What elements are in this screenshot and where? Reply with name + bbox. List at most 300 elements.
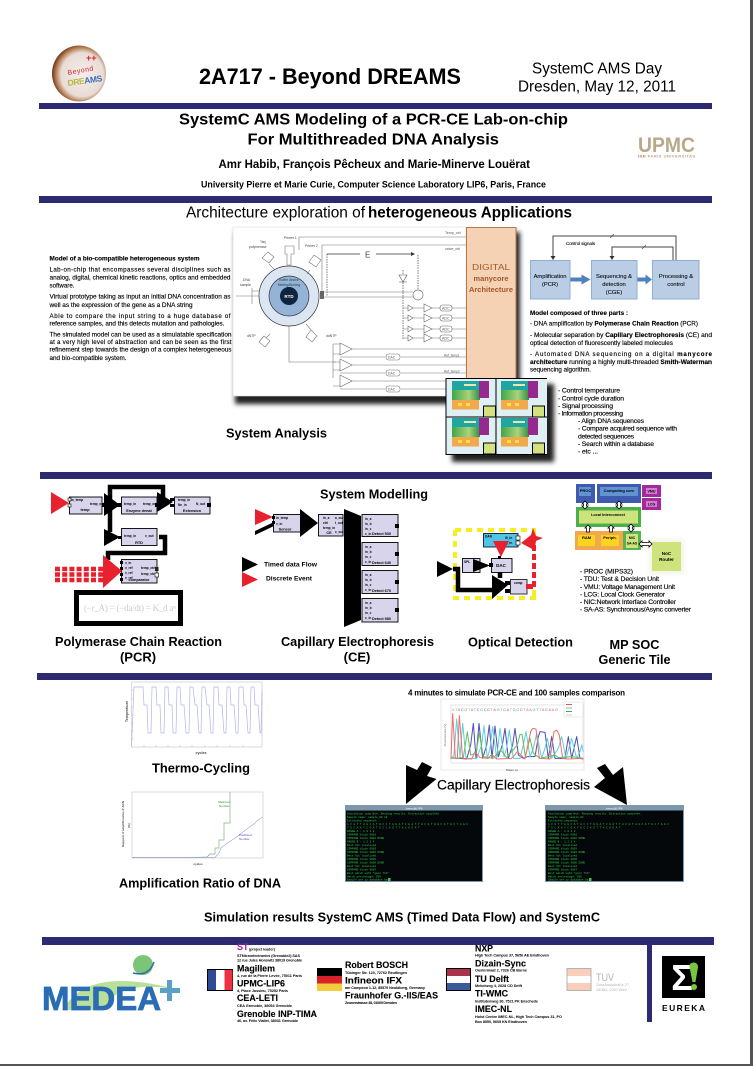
block: detector 580: Detect 580 — [372, 617, 391, 621]
block: enzyme denat: temp_in — [124, 502, 136, 506]
terminal: SystemC AMS run: COMPARE block 0004 DONE — [347, 850, 384, 854]
text block: model composition: - Automated DNA sequencing on a digital manycore — [530, 351, 713, 358]
partners: Netherlands: IMEC-NL — [475, 1004, 512, 1015]
block: detector 530: c_in — [365, 532, 371, 536]
box: amplification — [530, 260, 570, 299]
chart: thermo-cycling — [125, 682, 262, 755]
partners: Netherlands: Oostermaat 2, 7326 CB Borne — [475, 968, 527, 972]
amplifiers and reference lines: Ref_temp2 — [444, 370, 460, 374]
block: temp: in_temp — [71, 498, 83, 502]
block: detector 640: in_b — [365, 550, 372, 554]
caption: capillary electrophoresis result: Capillary Electrophoresis — [437, 778, 590, 792]
chart legend — [564, 702, 583, 717]
chip: circular reactor: Buffer device — [279, 278, 299, 282]
block: temp: temp — [80, 508, 90, 512]
chart: amplification ratio: Malicious — [218, 800, 231, 804]
block: comparator: comparator — [129, 578, 150, 582]
text block: system model description: and bio-compatible system. — [50, 355, 127, 362]
block: RTD — [122, 528, 157, 546]
terminal: SystemC AMS run: Sample name: sample_00 CE — [347, 815, 388, 819]
chart: amplification ratio — [121, 792, 263, 866]
footer divider — [42, 937, 714, 945]
block: comparator — [122, 560, 158, 583]
tile 1 — [452, 381, 496, 417]
chip: circular reactor — [259, 266, 324, 326]
terminal: SystemC AMS run: A C G T T A G C A T G C C T A G A T C G A T T A C G T A G C A T G C T A G C — [347, 823, 468, 826]
block: sensor: in_temp — [276, 516, 288, 520]
partners: Austria: TUV — [596, 972, 615, 984]
block: extension: Extension — [183, 509, 202, 513]
terminal: SystemC run: COMPARE block 0001 — [548, 832, 577, 836]
block: CE: t_out — [335, 521, 344, 525]
footer vertical divider — [647, 945, 652, 1022]
block: sensor: v_in — [276, 522, 282, 526]
block: source: DAN — [485, 534, 493, 538]
block: detector 670 — [362, 570, 399, 594]
block: memory and peripherals: Periph. — [603, 535, 617, 540]
ADC channels: ADC — [442, 306, 450, 310]
block: DAC: DAC — [496, 563, 507, 568]
terminal: SystemC run: Extracted sequence: — [548, 818, 579, 822]
terminal: SystemC AMS run: COMPARE block 0002 DONE — [347, 836, 384, 840]
partners: Germany: Tübinger Str. 123, 72762 Reutlingen — [345, 971, 408, 975]
block: PROC: PROC — [580, 488, 591, 493]
text block: model composition: - Molecular separation by Capillary Electrophoresis (CE) and — [530, 332, 713, 339]
list: tile legend: - VMU: Voltage Management Unit — [580, 584, 675, 591]
block: NoC router — [649, 539, 684, 574]
block: enzyme denat: temp_out — [143, 502, 158, 506]
list: processing tasks: - Control temperature — [558, 388, 620, 394]
terminal: SystemC run: Simulation complete. Reading results. Extraction complete. — [548, 812, 642, 816]
terminal: SystemC AMS run: COMPARE block 0001 — [347, 832, 376, 836]
partners: Germany: Infineon IFX — [345, 976, 403, 986]
red event bus — [55, 569, 103, 580]
text block: system model description: refinement step towards the design of a complex heterogeneous — [50, 347, 232, 354]
block: detector 670: in_b — [365, 578, 372, 582]
text block: model composition: optical detection of fluorescently labeled molecules — [530, 340, 673, 347]
flag: Netherlands — [446, 968, 470, 990]
box: processing and control — [652, 260, 699, 299]
logo: EUREKA: Σ — [671, 957, 693, 998]
tile 3 — [452, 418, 496, 454]
block: memory and peripherals — [575, 531, 623, 550]
block: detector 530: in_a — [365, 517, 372, 521]
caption: amplification ratio: Amplification Ratio of DNA — [119, 876, 282, 890]
ADC channels — [403, 304, 466, 342]
terminal: SystemC AMS run: Best match with "gene 713" — [347, 871, 389, 875]
terminal: SystemC run — [545, 805, 684, 882]
terminal: SystemC AMS run: COMPARE block 0005 — [347, 857, 376, 861]
block: extension: Ne_in — [178, 503, 187, 507]
affiliation: University Pierre et Marie Curie, Computer Science Laboratory LIP6, Paris, France — [201, 180, 546, 190]
wires and control lines: valve_ctrl — [445, 247, 460, 251]
caption: CE: Capillary Electrophoresis — [281, 634, 434, 649]
section heading: architecture: Architecture exploration of — [186, 204, 366, 222]
partners: France: ST — [237, 942, 249, 952]
caption: CE — [281, 634, 434, 664]
arrows: bus connections — [582, 501, 652, 547]
block: NIC: SA-AS — [627, 542, 638, 546]
terminal: SystemC run: Sample name: sample_02 — [548, 815, 584, 819]
text block: system model description: analog, digital, chemical kinetic reactions, optics and embedded — [50, 274, 231, 281]
event and date: SystemC AMS Day — [532, 60, 662, 78]
box: amplification: Amplification — [534, 274, 566, 280]
partners: Germany — [345, 960, 438, 1005]
partners: Netherlands: High Tech Campus 37, 5656 AE Eindhoven — [475, 954, 550, 958]
terminal: SystemC run: COMPARE block 0004 DONE — [548, 850, 585, 854]
partners: France: 12 rue Jules Horowitz 38019 Grenoble — [237, 958, 302, 962]
flag: France — [208, 970, 232, 990]
title: 2A717 - Beyond DREAMS — [199, 64, 461, 89]
text block: system model description: software. — [50, 283, 75, 290]
partners: Austria: 28/384, 1040 Wien — [596, 988, 627, 992]
terminal: SystemC run: A C G T T A G C A T G C C T A G A T C G A T T A C G T A G C A T G C T A G C — [548, 823, 669, 826]
block: detector 640: c_in — [365, 560, 371, 564]
block: CE: CE — [326, 531, 332, 535]
text block: system model description: Model of a bio-compatible heterogeneous system — [50, 256, 200, 262]
text block: system model description: The simulated model can be used as a simulatable specification — [50, 332, 232, 339]
list: processing tasks: - etc ... — [578, 448, 598, 456]
arrow: right result — [594, 764, 627, 805]
chart: amplification ratio: (%) — [127, 823, 131, 828]
caption: optical detection: Optical Detection — [468, 634, 573, 650]
ADC channels: ADC — [442, 316, 450, 320]
partners: Netherlands: Institutenweg 30, 7521 PK Enschede — [475, 1000, 538, 1004]
partners: France: Magillem — [237, 964, 275, 974]
block: extension: N_out — [196, 502, 206, 506]
partners: France: STMicroelectronics (Grenoble2) SAS — [237, 954, 300, 958]
syringes and reagent labels: dNTP — [247, 334, 256, 338]
block: NIC: NIC — [629, 536, 636, 540]
logo: UPMC: UPMC — [638, 134, 695, 157]
terminal: SystemC run: xterm@LIP6 — [606, 806, 623, 810]
partners: Netherlands: TI-WMC — [475, 988, 508, 1000]
logo: UPMC: IIIII PARIS UNIVERSITAS — [638, 154, 695, 158]
text block: system model description: reference samples, and this detects mutation and pathologies. — [50, 321, 225, 328]
terminal: SystemC AMS run: Simulation complete. Reading results. Extraction complete. — [347, 812, 441, 816]
terminal: SystemC run: COMPARE block 0007 — [548, 868, 577, 872]
list: processing tasks: - Control cycle duration — [558, 396, 624, 402]
list: processing tasks: - Align DNA sequences — [578, 418, 645, 425]
partners: Austria — [596, 972, 630, 992]
block: computing core: Computing core — [604, 488, 635, 493]
caption: system analysis: System Analysis — [226, 426, 327, 440]
terminal: SystemC AMS run: T G C A A T C G A T G C C A G T T A C G G A T — [347, 826, 420, 830]
block: comparator: temp_ctrl — [141, 572, 155, 576]
divider — [39, 196, 712, 203]
wires and control lines — [289, 231, 466, 362]
caption: MP SOC: Generic Tile — [598, 652, 670, 667]
section heading: architecture — [186, 204, 572, 222]
block: source: i1_in — [505, 541, 512, 545]
amplifiers and reference lines — [333, 343, 466, 392]
block: CE: ctrl — [323, 521, 328, 525]
divider — [37, 673, 712, 680]
block: detector 530: Detect 530 — [372, 532, 391, 536]
caption: MP SOC — [598, 637, 670, 667]
poster heading — [179, 112, 568, 148]
partners: France: UPMC-LIP6 — [237, 978, 285, 990]
terminal: SystemC AMS run: RANGE A : 1 0 1 2 — [347, 830, 375, 833]
box: sequencing and detection: Sequencing & — [596, 274, 632, 280]
panel: digital manycore architecture: DIGITAL — [472, 262, 510, 272]
text block: model composition: sequencing algorithm. — [530, 366, 591, 374]
block: temp: temp_out — [90, 502, 105, 506]
chart: electropherogram — [441, 699, 584, 772]
partners: France: Grenoble INP-TIMA — [237, 1009, 317, 1020]
chart: electropherogram: Steps sc — [506, 768, 518, 772]
syringes and reagent labels: Primer 2 — [305, 244, 318, 248]
list: processing tasks: - Search within a database — [578, 441, 654, 448]
panel: digital manycore architecture: Architecture — [469, 285, 513, 294]
diagram: MP SOC tile — [575, 484, 684, 574]
block: enzyme denat — [122, 497, 158, 514]
flow diagram: three stages — [530, 234, 699, 299]
section heading: architecture: heterogeneous Applications — [368, 204, 572, 222]
partners: Netherlands — [475, 944, 562, 1024]
partners: Netherlands: TU Delft — [475, 974, 510, 985]
terminal: SystemC AMS run: COMPARE block 0006 DONE — [347, 860, 384, 864]
terminal: SystemC AMS run: Match percentage: 93% — [347, 874, 381, 878]
logo: Beyond DREAMS — [52, 46, 106, 102]
terminal: SystemC run: Best hit localised — [548, 854, 577, 858]
diagram: PCR model — [51, 487, 211, 624]
block: temp — [68, 497, 105, 514]
partners: France: 46, av. Félix Viallet, 38031 Grenoble — [237, 1019, 298, 1023]
authors: Amr Habib, François Pêcheux and Marie-Minerve Louërat — [218, 157, 530, 171]
terminal: SystemC run: Match percentage: 93% — [548, 874, 582, 878]
text block: system model description: Able to compare the input string to a huge database of — [50, 313, 231, 320]
text block: system model description: at a very high level of abstraction and can be seen as the first — [50, 339, 232, 346]
caption: PCR: Polymerase Chain Reaction — [55, 634, 222, 649]
block: detector 670: Detect 670 — [372, 589, 391, 593]
chart: amplification ratio: Predicted — [239, 833, 252, 837]
list: tile legend: - LCG: Local Clock Generator — [580, 592, 666, 598]
chip: circular reactor: Melting/Binding — [278, 283, 300, 287]
flag: Austria — [567, 968, 591, 990]
block: RTD: v_out — [145, 534, 154, 538]
block: comparator: v_in — [125, 561, 131, 565]
block: detector 580: in_a — [365, 601, 372, 605]
logo: Beyond DREAMS: DREAMS — [67, 73, 103, 88]
block: source — [484, 534, 520, 547]
panel: digital manycore architecture: manycore — [474, 274, 508, 283]
chart: thermo-cycling: Temperature — [125, 701, 129, 722]
partners: France: 4, Place Jussieu, 75252 Paris — [237, 989, 288, 993]
chip: circular reactor: RTD — [284, 294, 294, 299]
syringes and reagent labels: ddNTP — [326, 334, 337, 338]
chart: thermo-cycling: cycles — [196, 751, 206, 755]
terminal: SystemC run: COMPARE block 0005 — [548, 857, 577, 861]
box: sequencing and detection — [592, 260, 637, 299]
chart: electropherogram: Fluorescence (V) — [443, 724, 447, 746]
block: memory and peripherals: RAM — [582, 535, 592, 540]
poster heading: SystemC AMS Modeling of a PCR-CE Lab-on-chip — [179, 112, 568, 128]
list: tile legend: - TDU: Test & Decision Unit — [580, 576, 659, 583]
partners: Netherlands: Box 8550, 5605 KN Eindhoven — [475, 1020, 528, 1024]
terminal: SystemC run: COMPARE block 0003 — [548, 846, 577, 850]
logo: MEDEA+ — [42, 955, 180, 1017]
caption: CE: (CE) — [344, 650, 370, 664]
box: processing and control: Processing & — [659, 274, 693, 280]
partners: France — [237, 942, 317, 1023]
terminal: SystemC AMS run: xterm@LIP6 — [406, 806, 423, 810]
text block: system model description: Virtual prototype taking as input an initial DNA concentration as — [50, 294, 230, 301]
partners: Germany: Robert BOSCH — [345, 960, 408, 971]
partners: France: CEA Grenoble, 38054 Grenoble — [237, 1004, 292, 1008]
amplifiers and reference lines: DAC — [388, 372, 396, 376]
text block: system model description: well as the expression of the gene as a DNA string — [48, 302, 193, 309]
terminal: SystemC run: Sample are in database base — [548, 878, 592, 882]
syringes and reagent labels: polymerase — [249, 245, 267, 249]
block: source: i0_in — [505, 536, 512, 540]
text block: model composition: - DNA amplification by Polymerase Chain Reaction (PCR) — [530, 320, 698, 328]
list: processing tasks: - Information processing — [558, 410, 623, 418]
partners: France: 4, rue de la Pierre Levée, 75011 Paris — [237, 974, 302, 978]
block: CE: temp_in — [323, 526, 335, 530]
partners: Netherlands: Holst Centre IMEC-NL, High Tech Campus 31, PO — [475, 1015, 562, 1019]
wires and control lines: Temp_ctrl — [445, 231, 461, 235]
partners: Netherlands: Dizain-Sync — [475, 958, 526, 970]
terminal: SystemC AMS run: Best hit localised — [347, 843, 376, 847]
equation box: (−r_A) = (−da/dt) = K_d aⁿ — [84, 603, 176, 613]
block: comparator: v_ref — [125, 566, 134, 570]
caption: MP SOC: MP SOC — [610, 637, 660, 652]
chart: amplification ratio: cycles — [193, 862, 203, 866]
block: comparator: temp_ctrl — [141, 566, 155, 570]
terminal: SystemC AMS run: Best hit localised — [347, 854, 376, 858]
block: detector 580: in_c — [365, 611, 372, 615]
block: LCG: LCG — [648, 502, 655, 506]
syringes and reagent labels: Primer 1 — [284, 236, 297, 240]
wires and control lines: E — [365, 250, 370, 260]
flag: Germany — [317, 968, 342, 991]
legend: signal types — [242, 557, 318, 587]
partners: Netherlands: NXP — [475, 944, 494, 954]
block: local interconnect: Local Interconnect — [591, 513, 626, 517]
text block: model composition: architecture running a highly multi-threaded Smith-Waterman — [530, 359, 712, 366]
divider — [40, 472, 712, 479]
list: processing tasks: detected sequences — [578, 434, 635, 440]
partners: France: CEA-LETI — [237, 993, 278, 1004]
ports — [102, 498, 174, 581]
block: splitter: SPL — [464, 560, 470, 564]
box: sequencing and detection: detection — [602, 282, 626, 288]
legend: signal types: Timed data Flow — [264, 562, 318, 568]
block: NoC router: Router — [659, 557, 674, 562]
header divider — [39, 103, 712, 109]
caption: thermo-cycling: Thermo-Cycling — [152, 760, 250, 776]
block: detector 640: Detect 640 — [372, 561, 391, 565]
terminal: SystemC AMS run: RANGE B : 1 2 2 4 — [347, 840, 375, 844]
block: detector 530 — [362, 514, 399, 536]
block: CE: a_out — [335, 516, 344, 520]
panel: digital manycore architecture — [466, 228, 516, 388]
event and date: Dresden, May 12, 2011 — [518, 78, 676, 96]
block: sensor — [272, 514, 301, 532]
equation box — [76, 592, 180, 624]
block: NoC router: NoC — [662, 551, 672, 556]
terminal: SystemC run: Best hit localised — [548, 864, 577, 868]
section caption: simulation results: Simulation results SystemC AMS (Timed Data Flow) and SystemC — [204, 910, 600, 924]
terminal: SystemC run: RANGE B : 1 2 2 4 — [548, 840, 576, 844]
block: CE — [318, 514, 344, 536]
chart: amplification ratio: Rapport d'amplification d'ADN — [121, 801, 125, 847]
terminal: SystemC AMS run — [345, 805, 483, 882]
text block: model composition — [530, 310, 713, 374]
logo: EUREKA — [662, 956, 705, 1013]
list: processing tasks: - Signal processing — [558, 403, 613, 410]
chart: amplification ratio: Number — [219, 804, 230, 808]
list: tile legend — [580, 568, 692, 614]
block: detector 670: in_a — [365, 573, 372, 577]
list: tile legend: - NIC:Network Interface Controller — [580, 599, 677, 606]
text block: model composition: Model composed of three parts : — [530, 310, 628, 317]
icon: discrete event inputs — [51, 492, 122, 588]
flow diagram: three stages: Control signals — [566, 241, 596, 246]
block: RTD: RTD — [135, 541, 143, 545]
block: detector 640: in_a — [365, 545, 372, 549]
diagram: lab-on-chip architecture — [233, 227, 520, 404]
partners: France: (project leader) — [249, 948, 276, 952]
syringes and reagent labels: sample — [240, 283, 251, 287]
logo: MEDEA+: MEDEA — [42, 980, 161, 1017]
logo: Beyond DREAMS: Beyond — [67, 66, 94, 77]
block: detector 640: in_c — [365, 555, 372, 559]
tile 4 — [501, 418, 544, 454]
section heading: system modelling: System Modelling — [320, 488, 428, 502]
ADC channels: ADC — [442, 336, 450, 340]
partners: Austria: Gusshausstraße 27, — [596, 983, 630, 987]
list: processing tasks — [558, 388, 677, 456]
box: sequencing and detection: (CGE) — [606, 290, 622, 296]
logo: Beyond DREAMS: ++ — [86, 53, 97, 63]
list: tile legend: - PROC (MIPS32) — [580, 568, 633, 576]
partners: Germany: am Campeon 1-12, 85579 Neubiberg, Germany — [345, 986, 426, 990]
block: detector 530: in_b — [365, 522, 372, 526]
terminal: SystemC AMS run: Best hit localised — [347, 864, 376, 868]
block: CE: in_a — [323, 516, 330, 520]
block: extension: temp_in — [178, 498, 190, 502]
poster heading: For Multithreaded DNA Analysis — [248, 132, 499, 148]
arrow: left result — [406, 762, 436, 804]
diagram: manycore chip grid — [446, 378, 554, 462]
partners: Netherlands: Mekelweg 4, 2628 CD Delft — [475, 984, 523, 988]
terminal: SystemC AMS run: COMPARE block 0007 — [347, 868, 376, 872]
tile 2 — [501, 381, 544, 417]
legend: signal types: Discrete Event — [266, 576, 313, 582]
block: detector 580 — [362, 598, 399, 622]
list: processing tasks: - Compare acquired sequence with — [578, 426, 677, 432]
amplifiers and reference lines: Ref_temp1 — [444, 354, 460, 358]
chart: electropherogram: ATACGTATCGCCTAGTCATGGCTAAGTTACAAG — [452, 708, 558, 712]
block: detector 580: c_in — [365, 616, 371, 620]
block: comparator: v_ref — [125, 571, 134, 575]
terminal: SystemC run: Best match with "gene 713" — [548, 871, 590, 875]
icon: timed data flow inputs — [104, 492, 173, 546]
block: extension — [174, 497, 211, 514]
block: CE: c_out — [335, 530, 344, 534]
block: detector 670: c_in — [365, 588, 371, 592]
heading: simulation time: 4 minutes to simulate PCR-CE and 100 samples comparison — [408, 688, 625, 698]
block: detector 670: in_c — [365, 583, 372, 587]
block: comparator: comp — [514, 581, 523, 585]
logo: EUREKA: EUREKA — [662, 1003, 705, 1013]
block: detector 580: in_b — [365, 606, 372, 610]
diagram: optical detection model — [437, 528, 543, 599]
block: enzyme denat: Enzyme denat — [126, 509, 153, 513]
block: comparator: v_ref — [125, 576, 134, 580]
